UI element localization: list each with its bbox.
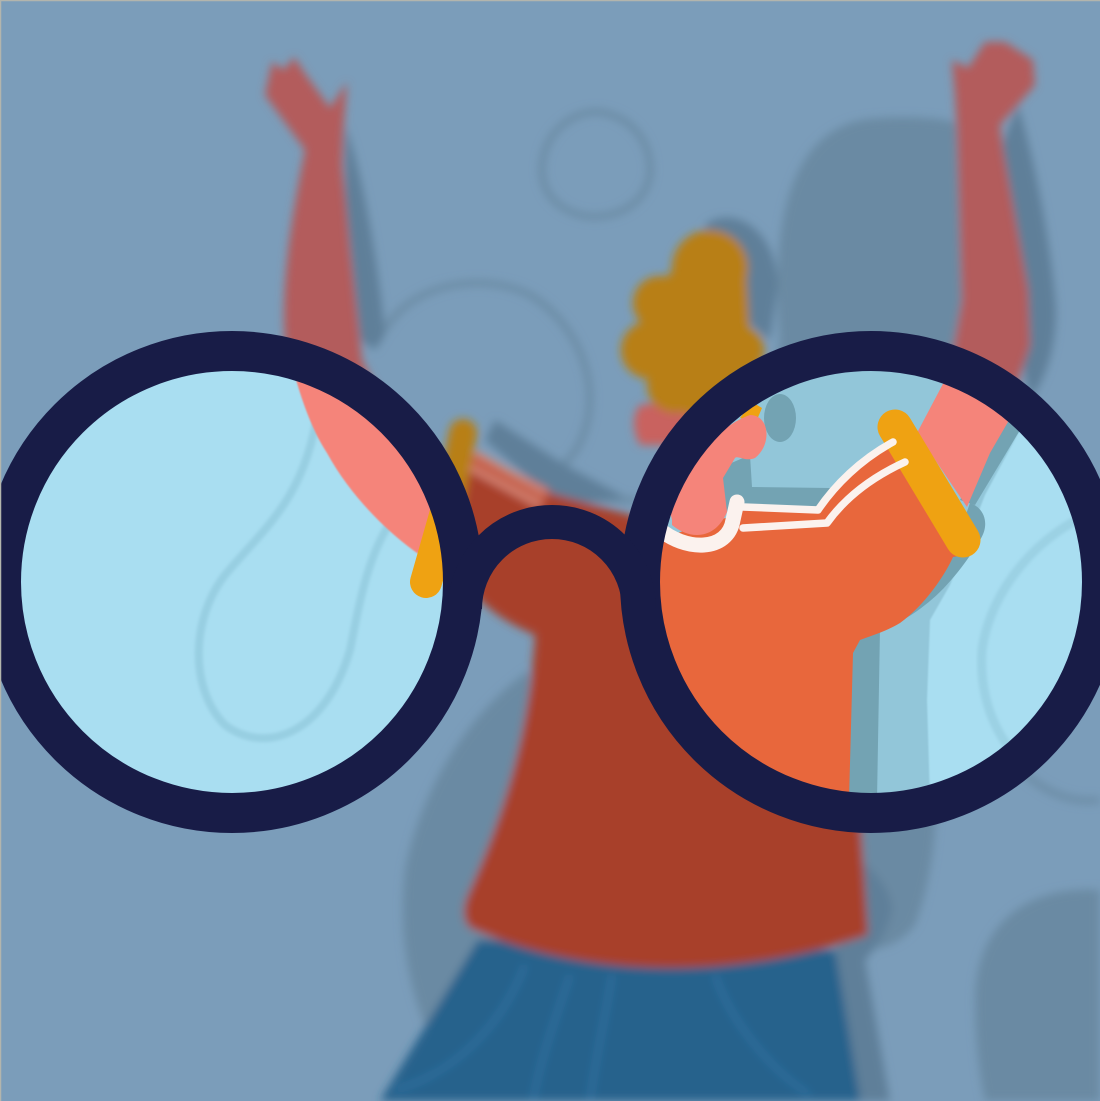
right lens shadow: shoulder <box>907 504 986 618</box>
blurred jeans seams <box>395 965 810 1101</box>
blurred background blob: bottom right <box>975 890 1100 1101</box>
right rim <box>640 351 1100 813</box>
blurred shadow: left arm <box>345 125 385 350</box>
right lens hair <box>740 404 762 418</box>
right lens arm <box>917 380 1012 507</box>
right lens darker blob <box>655 360 1020 800</box>
blurred collar stripes <box>470 452 545 505</box>
glasses <box>1 351 1100 813</box>
blurred loop: right edge <box>1000 740 1100 801</box>
blurred shadow: right arm <box>1000 105 1056 400</box>
blurred loop: large line <box>385 283 640 500</box>
blurred background blob: right <box>760 117 1000 950</box>
right lens loop line <box>978 518 1074 746</box>
left lens bangle <box>426 505 448 582</box>
right lens shirt <box>650 442 965 800</box>
blurred sleeve trim <box>468 452 550 510</box>
blurred right arm <box>920 42 1035 480</box>
blurred hair <box>621 230 765 420</box>
right lens neck <box>670 415 766 535</box>
blurred shirt <box>455 470 868 968</box>
right lens shadow: head <box>764 394 796 442</box>
bridge <box>465 522 639 609</box>
left lens background <box>21 371 443 793</box>
right lens collar stripes <box>743 442 905 528</box>
right lens background <box>926 432 1082 785</box>
blurred shadow: left sleeve <box>485 420 625 505</box>
right lens shadow: arm <box>960 415 1020 505</box>
right lens neckline <box>658 502 737 545</box>
left lens loop line <box>199 410 392 738</box>
right lens bangle <box>895 427 963 540</box>
right lens collar sliver <box>670 515 671 516</box>
blurred neck <box>634 400 700 445</box>
blurred shadow: figure <box>835 860 892 1101</box>
right lens contents <box>660 371 1082 793</box>
right lens shadow: neck <box>723 458 830 512</box>
left lens arm <box>296 381 430 554</box>
blurred left arm <box>265 57 440 552</box>
blurred background blob: left <box>403 670 560 1101</box>
right lens shadow beside figure <box>849 632 880 793</box>
blurred scene <box>265 42 1100 1101</box>
blurred left bangle <box>448 433 463 510</box>
blurred jeans <box>380 940 860 1101</box>
left lens contents <box>21 371 443 793</box>
left rim <box>1 351 463 813</box>
blurred loop: small circle <box>542 112 650 217</box>
blurred shadow: head <box>705 218 778 340</box>
